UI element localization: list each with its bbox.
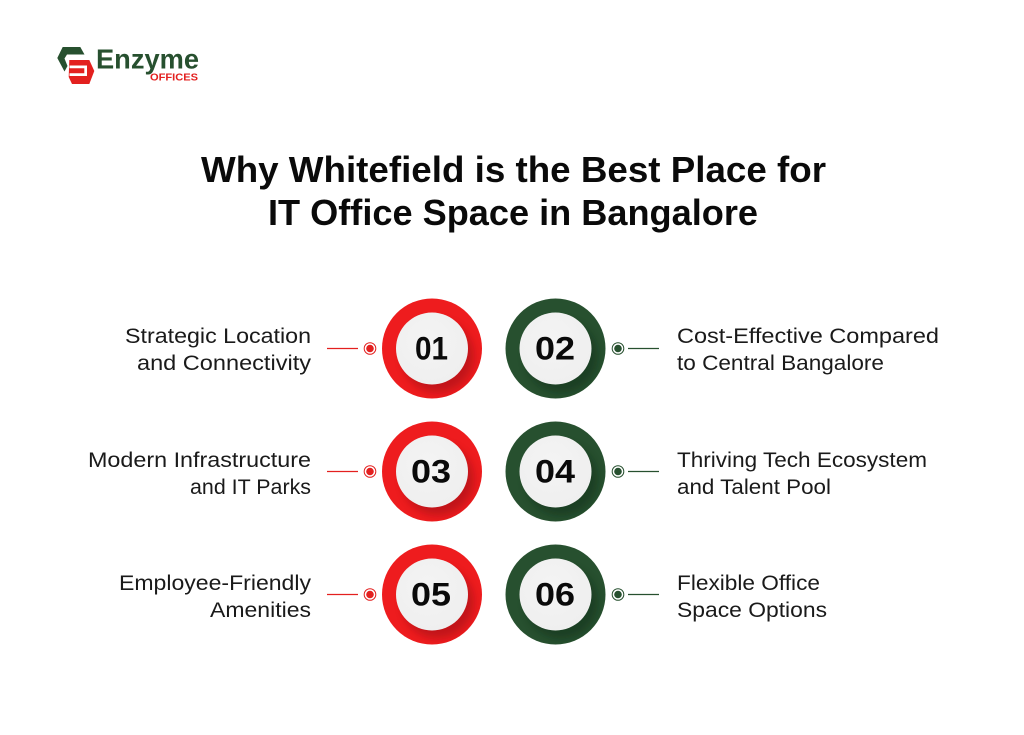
label 06: Flexible Office: [677, 571, 820, 595]
label 06: Space Options: [677, 598, 827, 622]
connector 03: [327, 466, 376, 477]
label 04: Thriving Tech Ecosystem: [677, 448, 927, 472]
title: IT Office Space in Bangalore: [268, 192, 758, 233]
connector 01: [327, 343, 376, 354]
label 06: [677, 571, 827, 622]
item 01: Strategic Location and Connectivity: [125, 298, 482, 398]
icon: hexagon E mark: [57, 47, 94, 84]
label 02: [677, 324, 939, 375]
title: [201, 149, 826, 233]
label 03: and IT Parks: [190, 475, 311, 499]
item 04: Thriving Tech Ecosystem and Talent Pool: [506, 422, 927, 522]
item 06: Flexible Office Space Options: [506, 544, 827, 644]
label 05: Employee-Friendly: [119, 571, 311, 595]
label 02: to Central Bangalore: [677, 351, 884, 375]
logo subtext: OFFICES: [150, 72, 198, 84]
title: Why Whitefield is the Best Place for: [201, 149, 826, 190]
badge 02: [506, 298, 606, 398]
label 01: [125, 324, 311, 375]
logo: Enzyme Offices: [57, 44, 199, 84]
badge 06: [506, 544, 606, 644]
connector 02: [612, 343, 659, 354]
logo wordmark: Enzyme: [96, 44, 199, 74]
connector 06: [612, 589, 659, 600]
item 02: Cost-Effective Compared to Central Bangalore: [506, 298, 939, 398]
badge 01: [382, 298, 482, 398]
badge 04: [506, 422, 606, 522]
label 01: Strategic Location: [125, 324, 311, 348]
badge 03: 03: [411, 454, 451, 490]
label 03: Modern Infrastructure: [88, 448, 311, 472]
badge 04: 04: [535, 454, 575, 490]
label 03: [88, 448, 311, 499]
label 05: [119, 571, 311, 622]
item 03: Modern Infrastructure and IT Parks: [88, 422, 482, 522]
badge 02: 02: [535, 330, 575, 366]
badge 06: 06: [535, 576, 575, 612]
label 05: Amenities: [210, 598, 311, 622]
badge 03: [382, 422, 482, 522]
connector 04: [612, 466, 659, 477]
label 01: and Connectivity: [137, 351, 311, 375]
badge 05: [382, 544, 482, 644]
badge 01: 01: [415, 330, 448, 366]
label 04: [677, 448, 927, 499]
connector 05: [327, 589, 376, 600]
badge 05: 05: [411, 576, 451, 612]
label 04: and Talent Pool: [677, 475, 831, 499]
item 05: Employee-Friendly Amenities: [119, 544, 482, 644]
label 02: Cost-Effective Compared: [677, 324, 939, 348]
